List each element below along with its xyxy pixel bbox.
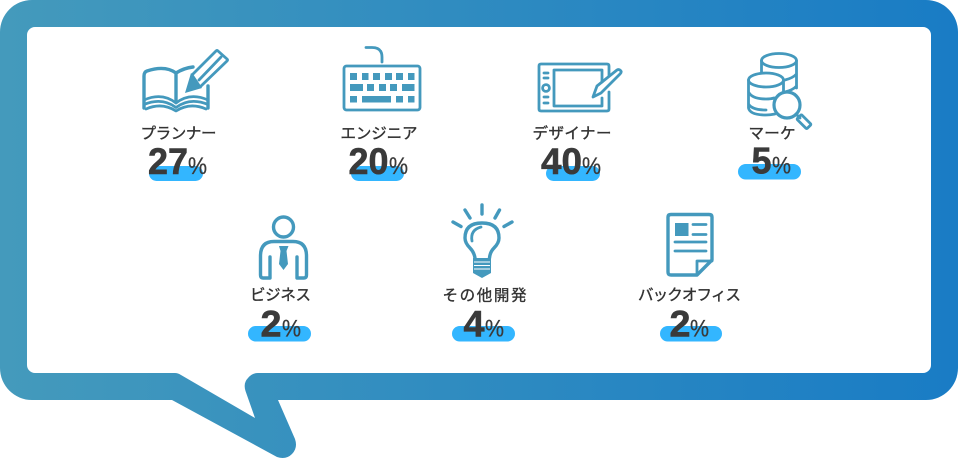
item: back office [638, 214, 741, 344]
pill highlight [351, 166, 404, 181]
percent sign: % [485, 316, 504, 342]
value: 4%: 4 [464, 304, 485, 344]
percent sign: % [389, 153, 408, 180]
icon: document [668, 214, 712, 275]
value: 2%: 2 [260, 304, 282, 344]
icon: pen tablet [539, 64, 621, 111]
value: 2%: 2 [670, 304, 690, 344]
pill highlight [452, 326, 515, 342]
pill highlight [149, 166, 203, 181]
pill highlight [738, 164, 801, 180]
item: marketing [738, 54, 811, 182]
percent sign: % [282, 316, 301, 342]
item: designer [532, 64, 621, 182]
item: planner [140, 50, 228, 182]
percent sign: % [690, 316, 709, 342]
value: 5%: 5 [752, 140, 772, 182]
pill highlight [660, 326, 722, 342]
icon: businessperson [260, 217, 306, 278]
value: 20%: 20 [348, 141, 388, 182]
icon: keyboard [344, 48, 420, 110]
label: back office: バックオフィス [638, 286, 741, 304]
label: business: ビジネス [250, 286, 311, 304]
item: other development [442, 205, 527, 344]
value: 27%: 27 [148, 141, 188, 182]
label: designer: デザイナー [532, 124, 612, 142]
pill highlight [546, 166, 600, 181]
icon: database and magnifier [748, 54, 811, 129]
icon: book and pencil [144, 50, 228, 111]
percent sign: % [582, 153, 601, 180]
item: business [248, 217, 311, 344]
label: engineer: エンジニア [340, 126, 418, 142]
item: engineer [340, 48, 420, 182]
percent sign: % [188, 153, 207, 180]
label: planner: プランナー [140, 124, 216, 142]
label: other development: その他開発 [442, 286, 527, 304]
percent sign: % [772, 152, 791, 180]
icon: light bulb [453, 205, 512, 278]
label: marketing: マーケ [748, 124, 796, 142]
value: 40%: 40 [541, 141, 582, 182]
pill highlight [248, 326, 311, 342]
